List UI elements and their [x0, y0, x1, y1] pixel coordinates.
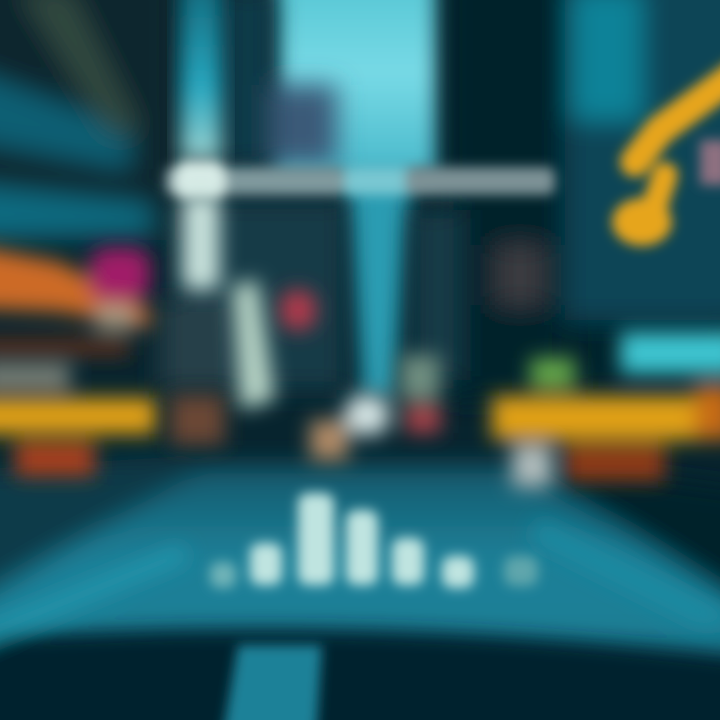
sky	[275, 0, 440, 395]
neon signs: left	[0, 245, 156, 476]
grey banner bar	[165, 160, 555, 200]
buildings: right	[412, 0, 720, 400]
road bar chart glyph	[210, 493, 538, 588]
bar 3	[298, 493, 334, 585]
bar 7	[504, 556, 538, 586]
buildings: left	[0, 0, 345, 390]
icon: yellow music note sign	[612, 75, 720, 246]
bar 1	[210, 562, 236, 588]
tower beside sky	[180, 0, 222, 160]
bar 4	[346, 510, 378, 585]
bar 6	[442, 556, 474, 588]
road	[0, 455, 720, 670]
bar 2	[250, 543, 282, 585]
white vertical signs	[182, 195, 275, 410]
neon signs: right	[492, 332, 720, 487]
road lane marking	[222, 645, 322, 720]
street level lights	[170, 290, 441, 460]
bar 5	[392, 538, 424, 585]
road edge and foreground dashboard	[0, 520, 720, 720]
